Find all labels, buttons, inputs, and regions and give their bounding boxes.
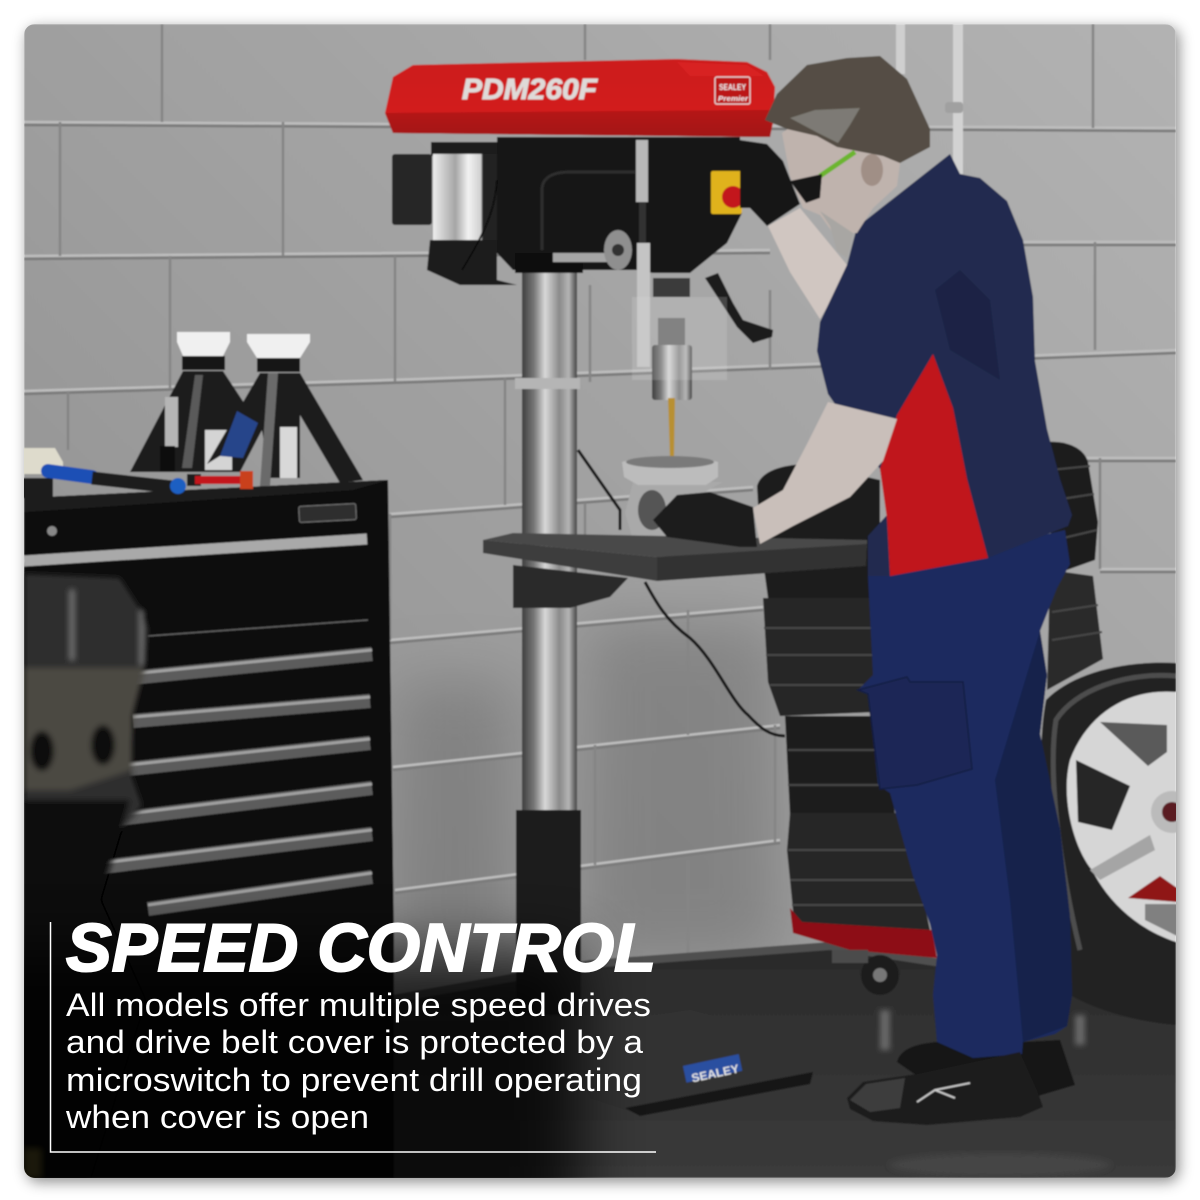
drill press [385, 59, 867, 1116]
head [765, 56, 930, 258]
conduit pipes on wall [896, 24, 963, 174]
white saddles [177, 332, 230, 356]
hammers on cabinet [23, 448, 253, 498]
front shoe [847, 1052, 1043, 1125]
safety switch [711, 171, 744, 214]
body text: All models offer multiple speed drives [66, 987, 651, 1023]
depth rod [636, 140, 650, 367]
model name: PDM260F [462, 74, 598, 106]
drill table [483, 533, 867, 581]
beard [820, 211, 853, 258]
drawer handles [24, 539, 372, 909]
body text: microswitch to prevent drill operating [66, 1062, 642, 1098]
engine block foreground [24, 573, 148, 1178]
background: block wall [24, 24, 1176, 994]
axle stands [130, 332, 363, 486]
base [560, 1010, 813, 1115]
tool cabinet [24, 480, 394, 1178]
red dolly [790, 908, 937, 958]
motor [427, 142, 517, 285]
raised arm [768, 208, 847, 319]
blue leaflet [220, 411, 258, 458]
caption frame [50, 922, 656, 1152]
workpiece [622, 455, 718, 530]
tyre stacks [757, 442, 1103, 930]
spindle and chuck [651, 277, 693, 457]
floor [393, 941, 1176, 1178]
chuck guard [632, 297, 727, 380]
rear shoe [897, 1040, 1075, 1096]
brand badge [715, 77, 750, 104]
spare wheel [1040, 662, 1176, 1024]
heading: SPEED CONTROL [66, 910, 656, 986]
height crank dial [553, 230, 632, 270]
lower glove [653, 492, 757, 547]
head body [497, 137, 742, 273]
brand badge: SEALEY [719, 82, 746, 92]
front stand [207, 373, 363, 483]
safety glasses [790, 152, 855, 203]
caption shade [0, 950, 580, 1200]
feed handle [705, 273, 773, 343]
upper glove [740, 140, 800, 226]
brand badge: Premier [718, 94, 749, 103]
base logo: SEALEY [690, 1062, 740, 1085]
dolly caster [832, 950, 899, 995]
table bracket [513, 565, 628, 608]
body text: when cover is open [65, 1099, 369, 1135]
brand plate [299, 504, 356, 523]
base logo [683, 1054, 742, 1085]
body text [65, 987, 651, 1135]
mechanic [653, 56, 1075, 1125]
thigh pocket [858, 677, 972, 789]
rear stand [130, 371, 262, 472]
red side panel [880, 354, 988, 576]
lower arm [753, 402, 897, 544]
power cord [578, 450, 785, 736]
polo shirt [817, 154, 1072, 576]
body text: and drive belt cover is protected by a [66, 1024, 644, 1060]
column [515, 270, 581, 1015]
capacitor [392, 154, 432, 225]
ear [861, 154, 883, 186]
red head cover [385, 59, 775, 137]
hair [765, 56, 930, 163]
trousers [858, 530, 1072, 1058]
